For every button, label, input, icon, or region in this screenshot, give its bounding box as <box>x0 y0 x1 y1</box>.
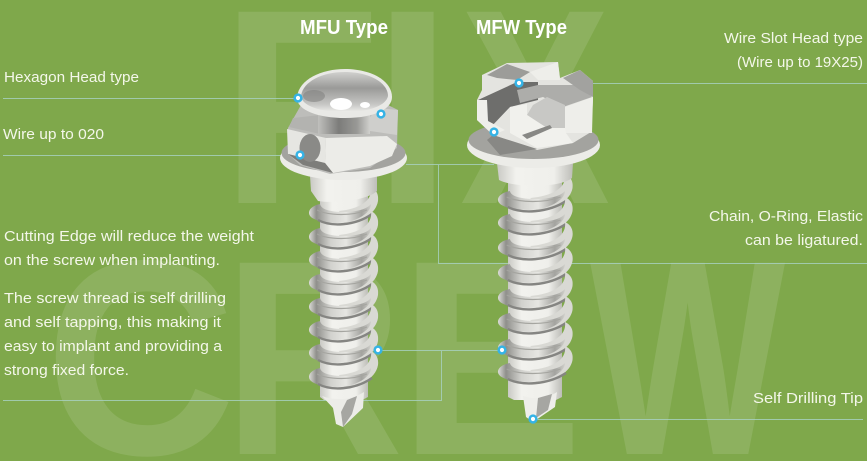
neck <box>310 176 377 202</box>
text: cutting edge: Cutting Edge will reduce the weight <box>4 228 255 245</box>
notch <box>522 125 552 139</box>
text: cutting edge: on the screw when implanting. <box>4 252 220 269</box>
wire hole <box>300 134 320 162</box>
lower dark facet <box>288 154 333 173</box>
drill tip <box>322 392 364 427</box>
drill tip <box>523 392 557 422</box>
shaft <box>320 195 368 400</box>
right arm face <box>565 97 593 133</box>
front face <box>325 136 397 173</box>
leader lines <box>3 84 867 420</box>
label: wire slot head: (Wire up to 19X25) <box>737 54 863 71</box>
threads <box>309 187 378 388</box>
label: chain o-ring elastic: can be ligatured. <box>745 232 863 249</box>
top slot face <box>487 64 530 80</box>
heading: MFU Type: MFU Type <box>300 17 388 39</box>
shaft <box>508 180 562 400</box>
centre chamfer <box>517 85 592 107</box>
flange shadow <box>487 135 537 155</box>
dark slot <box>478 82 538 128</box>
label: self drilling tip: Self Drilling Tip <box>753 390 863 407</box>
slotted head <box>477 62 593 155</box>
right arm top <box>563 70 593 97</box>
screw: MFU <box>280 69 407 427</box>
left face <box>287 129 326 163</box>
flange <box>280 134 407 180</box>
right labels <box>709 30 864 407</box>
text: screw thread: The screw thread is self drilling <box>4 290 226 307</box>
text: cutting edge <box>4 228 255 269</box>
label: hexagon head: Hexagon Head type <box>4 69 139 86</box>
heading: MFW Type: MFW Type <box>476 17 567 39</box>
label: wire slot head <box>724 30 863 71</box>
right upper facet <box>370 108 398 135</box>
neck under dome <box>318 112 370 134</box>
inner socket <box>527 97 565 128</box>
screw: MFW <box>467 62 600 422</box>
hex head <box>287 105 398 174</box>
callout markers <box>293 78 538 424</box>
neck <box>497 163 573 186</box>
left labels <box>3 69 255 379</box>
upper right arm <box>530 62 560 80</box>
label: chain o-ring elastic <box>709 208 864 249</box>
label: chain o-ring elastic: Chain, O-Ring, Elastic <box>709 208 864 225</box>
text: screw thread <box>4 290 226 379</box>
threads <box>498 174 573 383</box>
flange <box>467 121 600 168</box>
left upper facet <box>289 115 320 134</box>
dome head <box>297 69 392 118</box>
text: screw thread: and self tapping, this making it <box>4 314 222 331</box>
text: screw thread: strong fixed force. <box>4 362 129 379</box>
text: screw thread: easy to implant and providing a <box>4 338 223 355</box>
label: wire slot head: Wire Slot Head type <box>724 30 863 47</box>
body <box>477 62 593 150</box>
left pillar <box>477 100 505 135</box>
label: wire up to 020: Wire up to 020 <box>3 126 104 143</box>
front block <box>510 104 573 148</box>
